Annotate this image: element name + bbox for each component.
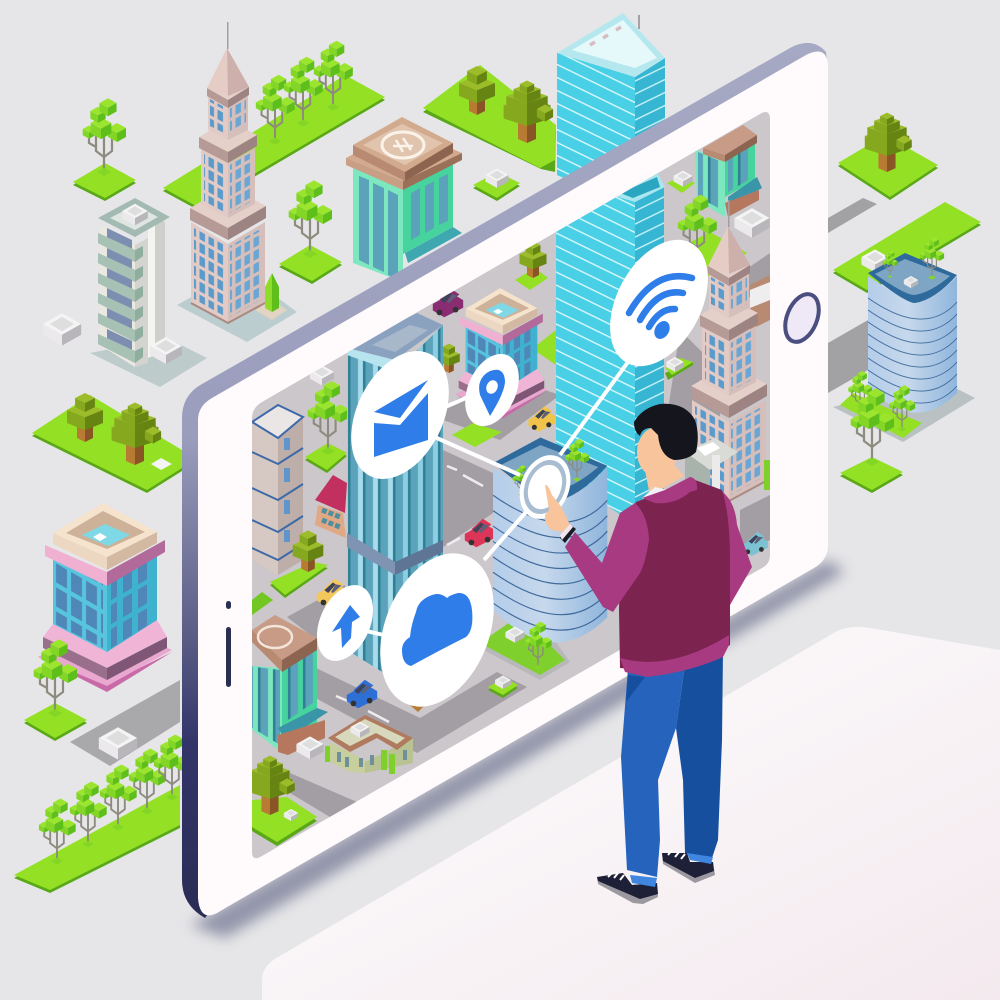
pocket shade (626, 675, 645, 702)
line to mail (430, 435, 520, 475)
residential tower with balconies (98, 198, 170, 367)
speaker dot (226, 601, 231, 609)
blue car (347, 680, 377, 708)
collar (642, 477, 697, 503)
small white box (150, 337, 182, 364)
red roof house (315, 475, 347, 538)
tile under pin (452, 423, 502, 447)
inner roof (110, 205, 158, 230)
green garden at base (840, 393, 922, 438)
purple car (433, 289, 463, 317)
white box on road (99, 727, 137, 760)
white column (148, 217, 155, 358)
green conical shrub (255, 273, 287, 320)
far cuff (687, 853, 713, 864)
white floor platform (262, 627, 1000, 1000)
tree tile (305, 381, 349, 473)
long green strip (833, 202, 981, 293)
base of round building (485, 623, 570, 680)
tile with dark tree (838, 113, 938, 200)
red car (465, 519, 495, 547)
pink hotel building (38, 503, 172, 692)
helipad building lower left (252, 615, 328, 755)
line to cloud (484, 512, 526, 560)
tile with dark tree left (32, 393, 182, 493)
round glass building on screen (493, 437, 607, 642)
far sleeve (715, 490, 752, 605)
small building behind tower (750, 275, 770, 330)
helipad building top right (695, 125, 762, 217)
white box top right (734, 208, 770, 238)
tile with box right of wifi (665, 357, 693, 380)
green tile with dark trees (423, 65, 556, 172)
gray column (155, 217, 165, 355)
tablet (182, 43, 828, 918)
skyscraper on screen (556, 172, 665, 525)
home button (779, 289, 825, 347)
green shrub (764, 460, 770, 490)
tile with olive tree lower left (248, 756, 317, 846)
icon: mail (332, 335, 468, 495)
tree tile (840, 388, 903, 493)
yellow car left (316, 578, 344, 606)
connector lines (362, 362, 628, 636)
road pieces (828, 198, 877, 233)
shoe left (597, 873, 658, 904)
vest (619, 480, 730, 669)
hotel on screen (455, 288, 548, 418)
line arrow to cloud (362, 630, 388, 636)
line to wifi (560, 362, 628, 455)
ornate tower base tile (177, 270, 297, 342)
small tree on tile (73, 98, 136, 201)
person (545, 404, 752, 904)
blue glass tower (347, 313, 443, 680)
small residential piece (685, 438, 738, 495)
near arm (565, 503, 649, 612)
hand and pointing finger (545, 485, 570, 532)
tree cluster tile (675, 195, 747, 277)
touch target (510, 447, 580, 527)
tablet screen city (240, 105, 775, 865)
jeans (621, 650, 723, 887)
icon: wifi (590, 223, 728, 383)
ornate clock tower (190, 22, 266, 323)
icon: upload arrow (306, 576, 384, 670)
roads (287, 253, 770, 817)
dark tree behind hotel (443, 344, 460, 373)
left background city (14, 13, 665, 893)
speaker slot (226, 627, 231, 687)
near cuff (630, 875, 657, 887)
white box near house (296, 736, 324, 759)
apartment block (252, 405, 303, 575)
neck (645, 462, 684, 496)
balcony floors (98, 228, 143, 363)
dark tree tile left (270, 530, 328, 598)
face (637, 427, 677, 477)
cuff (560, 524, 573, 540)
roof (98, 198, 170, 237)
small trees by round building (505, 439, 589, 670)
yellow car (528, 406, 556, 432)
rooftop trees (883, 237, 944, 288)
near leg (621, 665, 685, 877)
shoe right (662, 850, 715, 883)
green tile near hotel (537, 330, 556, 365)
small tree tile right of tower (279, 180, 342, 284)
curved glass building (868, 253, 957, 413)
long tile with tree row (14, 734, 191, 893)
right background city (828, 113, 981, 493)
tablet shadow (190, 560, 845, 938)
line mail to pin (443, 397, 468, 408)
dark tree tile (515, 241, 548, 290)
small flat-roof house (325, 715, 413, 774)
long green tile with trees (163, 41, 385, 210)
gray base tile (833, 380, 975, 442)
small trees on base (848, 371, 915, 432)
teal car (742, 532, 768, 556)
cyan skyscraper (557, 13, 665, 210)
road behind tablet (70, 680, 180, 766)
watch (560, 526, 576, 543)
tablet white front (198, 52, 828, 915)
helipad building (346, 117, 462, 282)
road markings (336, 466, 483, 722)
icon: cloud (359, 536, 515, 724)
hem (620, 635, 729, 677)
planter under cloud (410, 705, 424, 712)
tablet dark side edge (182, 43, 828, 918)
tile with box bottom (488, 676, 518, 698)
tile with box top right (667, 171, 695, 193)
screen base (250, 105, 775, 865)
hair (634, 404, 698, 460)
white collar (642, 487, 668, 505)
white box (43, 313, 81, 346)
small green tile (252, 592, 273, 615)
tile with white box (473, 169, 520, 201)
clock tower on screen (691, 200, 767, 501)
white box top left of screen (310, 365, 334, 386)
residential tower base (90, 338, 207, 387)
small tree on tile near hotel (24, 639, 87, 741)
icon: location pin (455, 346, 529, 434)
road piece lower (828, 320, 868, 393)
roof box (122, 204, 148, 225)
far leg (676, 650, 723, 858)
